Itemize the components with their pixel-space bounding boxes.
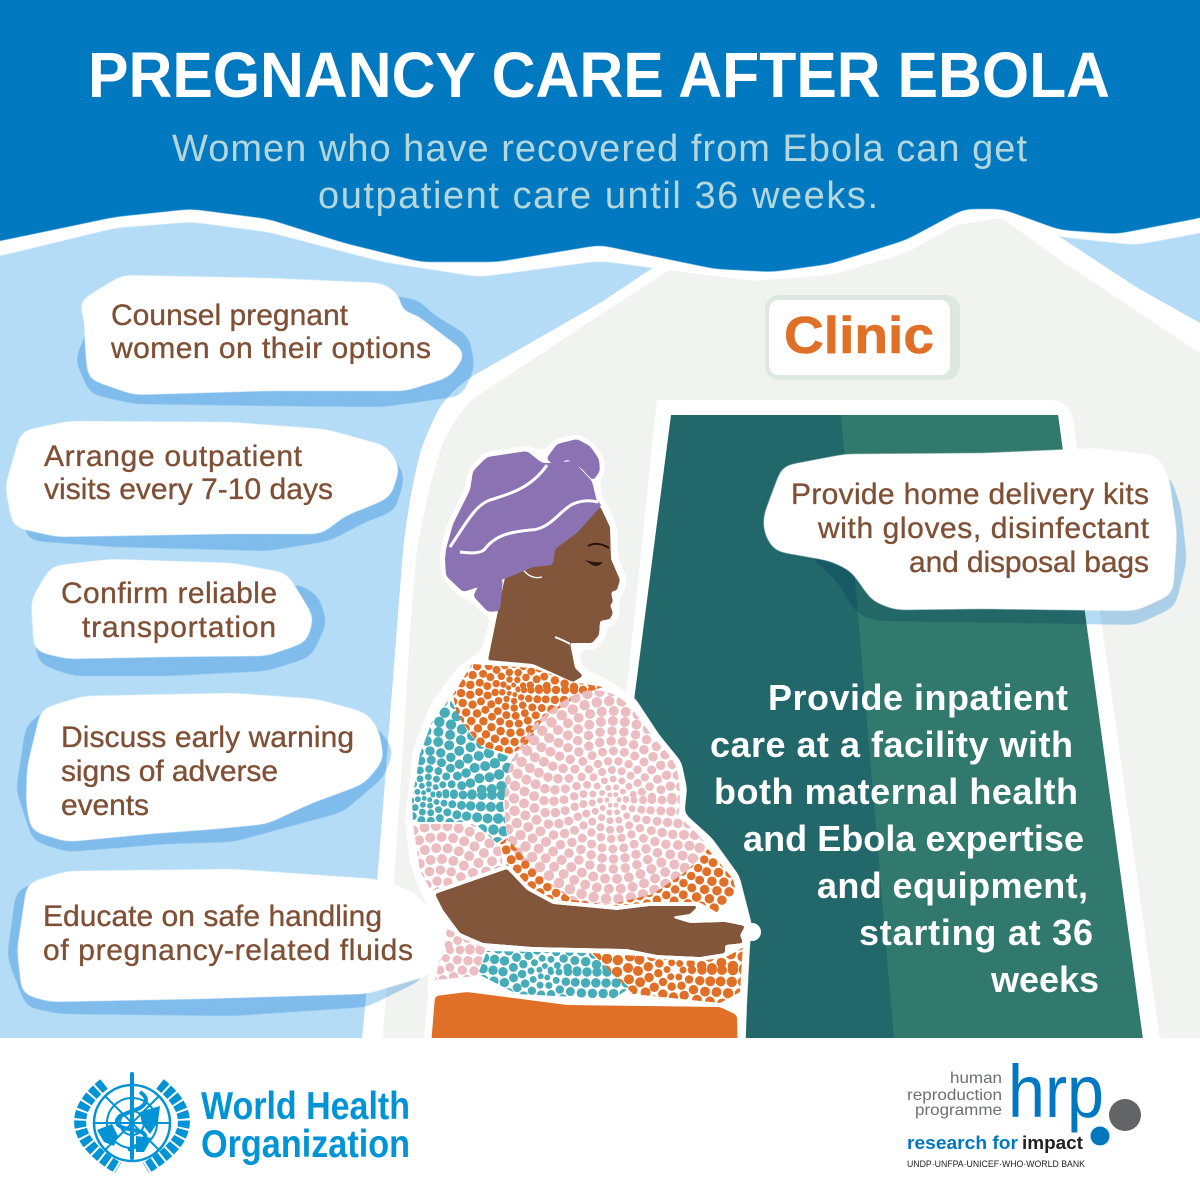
callout: counsel pregnant women — [75, 275, 475, 407]
tagline: impact — [1022, 1133, 1083, 1153]
callout: home delivery kits: and disposal bags — [909, 546, 1149, 579]
staff and serpent — [117, 1072, 146, 1160]
inpatient care text: care at a facility with — [710, 724, 1073, 765]
dress pattern: lower pink — [435, 929, 486, 980]
woman — [406, 435, 761, 1038]
callout: outpatient visits: Arrange outpatient — [44, 440, 303, 473]
footer — [0, 1038, 1200, 1200]
callout: safe handling of fluids: of pregnancy-related fluids — [43, 934, 413, 967]
callout: counsel pregnant women: Counsel pregnant — [111, 299, 349, 332]
inpatient care text: and Ebola expertise — [743, 818, 1084, 859]
white halo — [412, 441, 745, 1060]
inpatient care text: weeks — [990, 959, 1099, 1000]
globe — [94, 1085, 170, 1161]
header banner — [0, 0, 1200, 272]
hrp letters: hrp — [1008, 1050, 1104, 1133]
dress pattern: lower teal — [479, 951, 629, 998]
sponsors: UNDP·UNFPA·UNICEF·WHO·WORLD BANK — [907, 1159, 1086, 1170]
tagline: research for — [907, 1133, 1018, 1153]
callout: reliable transportation: transportation — [82, 611, 276, 644]
inpatient care text: and equipment, — [817, 865, 1088, 906]
inpatient care text — [710, 677, 1099, 1000]
skirt — [429, 992, 738, 1070]
dots — [1090, 1099, 1141, 1146]
tagline — [907, 1133, 1083, 1153]
eyebrow and eye — [585, 544, 609, 566]
dress pattern: lower orange — [592, 948, 743, 1003]
subtitle: Women who have recovered from Ebola can get — [172, 128, 1027, 170]
callout: outpatient visits — [5, 421, 405, 551]
WHO wordmark: Organization — [201, 1123, 410, 1166]
subtitle: outpatient care until 36 weeks. — [318, 175, 878, 217]
programme name: reproduction — [907, 1087, 1002, 1104]
dress pattern: teal panel — [412, 701, 513, 843]
inpatient care text: both maternal health — [714, 771, 1078, 812]
arm — [435, 869, 745, 957]
subtitle — [172, 128, 1027, 217]
callout: safe handling of fluids — [7, 869, 441, 1016]
WHO wordmark — [201, 1085, 410, 1166]
callout: home delivery kits: with gloves, disinfectant — [817, 512, 1150, 545]
callout: early warning signs: Discuss early warning — [61, 721, 354, 754]
jaw line — [555, 637, 570, 644]
dress pattern: orange under belly — [500, 838, 735, 912]
callout: home delivery kits: Provide home delivery kits — [791, 478, 1149, 511]
HRP logo — [907, 1050, 1141, 1170]
dress pattern: pink sleeve — [413, 824, 503, 891]
callout: early warning signs: signs of adverse — [61, 755, 278, 788]
clinic building — [360, 205, 1200, 1060]
title: PREGNANCY CARE AFTER EBOLA — [88, 39, 1110, 111]
clinic sign — [765, 295, 960, 380]
header wave white edge — [0, 0, 1200, 281]
callout: reliable transportation: Confirm reliable — [61, 577, 277, 610]
dress pattern: orange yoke — [453, 664, 603, 754]
dress pattern: pink belly — [504, 691, 722, 909]
callout: reliable transportation — [31, 559, 327, 676]
callout: home delivery kits — [763, 448, 1187, 625]
neck and face — [488, 506, 620, 682]
dress base — [412, 660, 745, 1003]
clinic sign: Clinic — [784, 307, 934, 365]
hand halo — [743, 923, 761, 941]
callout: early warning signs: events — [61, 789, 149, 822]
callout: counsel pregnant women: women on their options — [110, 332, 431, 365]
WHO wordmark: World Health — [201, 1085, 410, 1128]
wreath — [80, 1084, 184, 1168]
programme name: programme — [915, 1102, 1002, 1119]
turban — [445, 439, 603, 612]
inpatient care text: starting at 36 — [859, 912, 1093, 953]
earring — [522, 568, 542, 578]
continents — [97, 1106, 160, 1152]
callout: outpatient visits: visits every 7-10 days — [44, 473, 333, 506]
programme name: human — [950, 1070, 1002, 1087]
programme name — [907, 1070, 1002, 1119]
callout: early warning signs — [16, 693, 394, 852]
WHO emblem — [80, 1072, 184, 1168]
clinic door — [590, 400, 1160, 1040]
callout: safe handling of fluids: Educate on safe handling — [43, 900, 382, 933]
inpatient care text: Provide inpatient — [768, 677, 1068, 718]
